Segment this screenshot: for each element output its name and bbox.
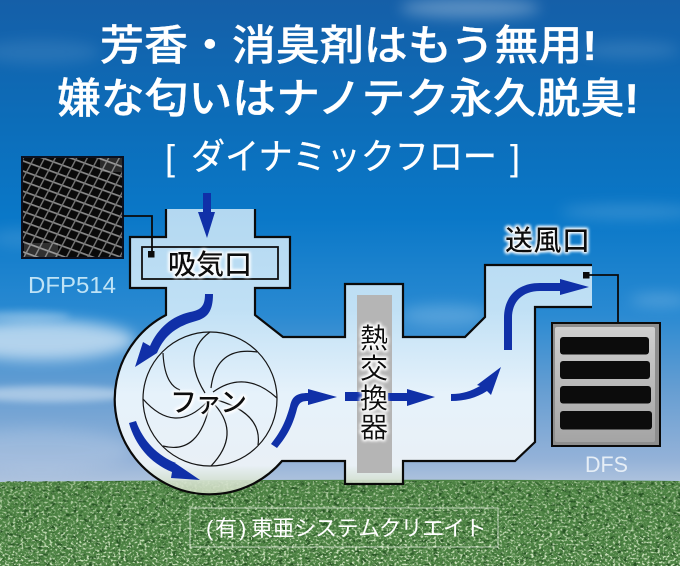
title: 芳香・消臭剤はもう無用 !	[100, 22, 597, 69]
flow arrows	[129, 193, 589, 480]
label: heat exchanger: 器	[360, 412, 388, 443]
title	[57, 22, 639, 122]
diagram: airflow duct	[115, 193, 592, 494]
arrow: after heat exchanger	[388, 389, 435, 406]
subtitle: dynamic flow: [	[165, 137, 175, 178]
label: outlet: 送風口	[505, 225, 590, 256]
label: DFS: DFS	[585, 452, 628, 477]
intake filter box	[142, 247, 278, 279]
duct outline	[115, 209, 592, 494]
fan wheel	[143, 332, 277, 466]
connector: outlet to DFS	[583, 272, 618, 323]
subtitle: dynamic flow: ]	[510, 137, 520, 178]
arrow: air entering	[198, 193, 215, 238]
company name plate: (有)東亜システムクリエイト	[206, 516, 487, 541]
arrow: around fan casing	[129, 421, 200, 480]
label: fan: ファン	[170, 388, 247, 418]
label: DFP514: DFP514	[28, 272, 116, 298]
filter photo: DFP514 mesh	[22, 157, 123, 258]
filter photo: DFS panel	[552, 323, 660, 446]
company name plate	[190, 508, 498, 547]
label: heat exchanger	[360, 323, 388, 443]
label: heat exchanger: 換	[360, 383, 388, 414]
title: 嫌な匂いはナノテク永久脱臭 !	[57, 75, 639, 122]
arrow: to outlet	[504, 279, 589, 350]
label: heat exchanger: 交	[360, 353, 388, 384]
label: heat exchanger: 熱	[360, 323, 388, 354]
duct body	[115, 209, 592, 494]
subtitle: dynamic flow: ダイナミックフロー	[191, 136, 497, 177]
arrow: curved rise	[451, 367, 501, 401]
arrow: intake to fan	[135, 294, 213, 367]
arrow: fan to heat exchanger	[271, 389, 337, 448]
background: grass field	[0, 480, 680, 566]
connector: DFP514 to intake	[123, 216, 154, 258]
arrow: through heat exchanger	[345, 392, 362, 401]
label: intake: 吸気口	[168, 249, 252, 280]
heat exchanger bar	[357, 295, 392, 473]
